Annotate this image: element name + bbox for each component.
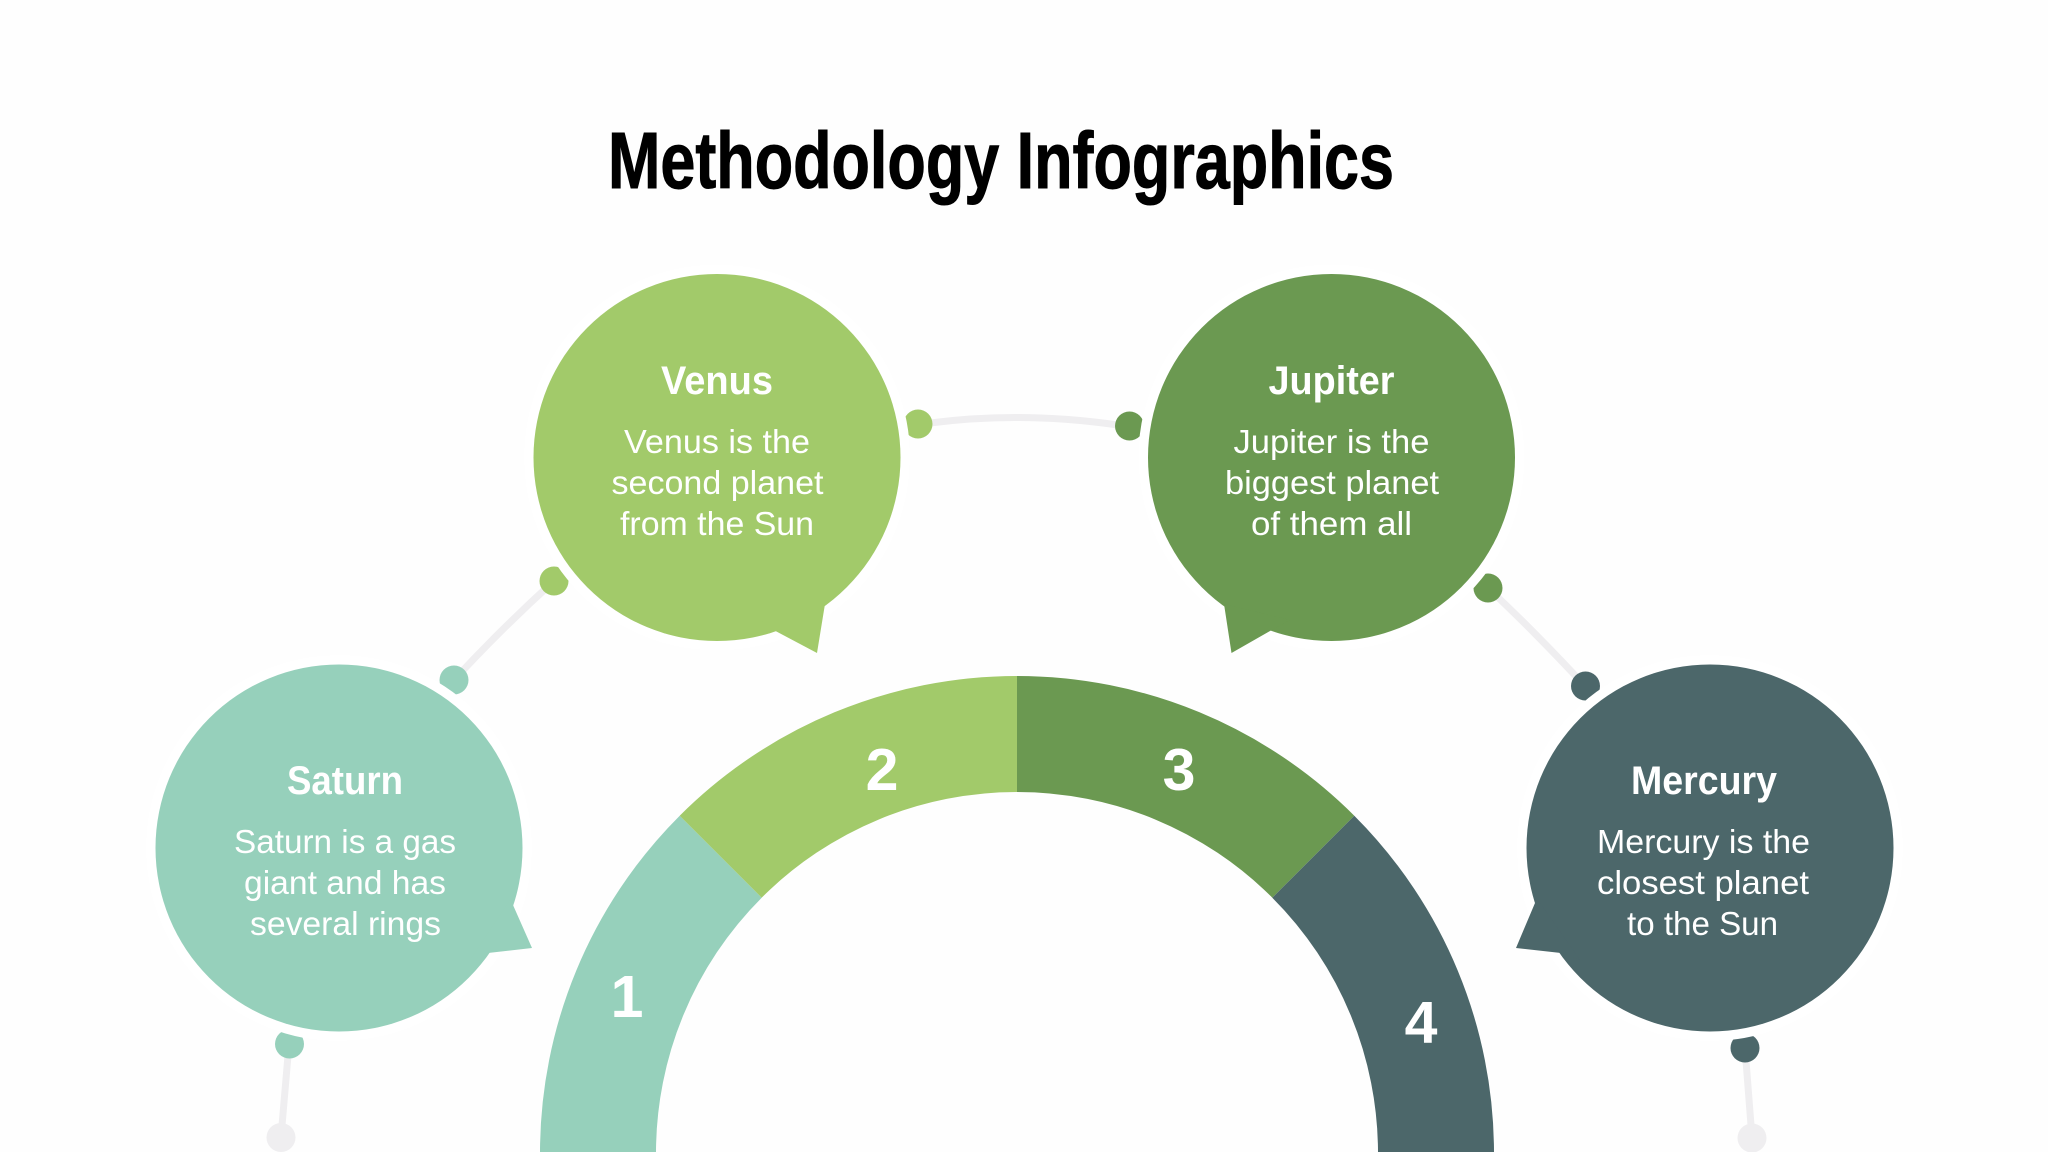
- Saturn description: giant and has: [244, 865, 446, 902]
- Jupiter description: Jupiter is the: [1234, 424, 1430, 461]
- Venus heading: Venus: [661, 359, 773, 403]
- Jupiter description: of them all: [1251, 506, 1412, 543]
- ring segment 4: [1272, 816, 1494, 1152]
- connector dots: Saturn: [275, 666, 468, 1058]
- end dot: Mercury lower connector: [1738, 1124, 1766, 1152]
- Venus description: second planet: [612, 465, 824, 502]
- Mercury heading: Mercury: [1631, 759, 1778, 803]
- semicircular ring chart: [540, 676, 1494, 1152]
- Jupiter description: biggest planet: [1225, 465, 1440, 502]
- Saturn description: [234, 824, 456, 943]
- Mercury description: closest planet: [1597, 865, 1810, 902]
- Saturn description: several rings: [250, 906, 441, 943]
- Venus description: [612, 424, 824, 543]
- Venus bubble shape: [534, 274, 900, 653]
- connector lines between bubbles: [281, 417, 1752, 1138]
- panel: Jupiter speech bubble: [1148, 274, 1515, 653]
- Saturn heading: Saturn: [287, 759, 403, 803]
- panel: Venus speech bubble: [534, 274, 900, 653]
- connector dots: Jupiter: [1115, 412, 1502, 602]
- Mercury description: Mercury is the: [1597, 824, 1810, 861]
- end dot: Saturn lower connector: [266, 1123, 296, 1152]
- panel: Saturn speech bubble: [156, 664, 532, 1032]
- Saturn description: Saturn is a gas: [234, 824, 456, 861]
- Venus description: from the Sun: [620, 506, 814, 543]
- panel: Mercury speech bubble: [1516, 664, 1894, 1032]
- ring segment 3: [1017, 676, 1354, 898]
- Jupiter heading: Jupiter: [1268, 359, 1394, 403]
- Mercury description: to the Sun: [1627, 906, 1778, 943]
- Jupiter description: [1225, 424, 1440, 543]
- connector dots: Mercury: [1571, 672, 1760, 1062]
- number 3: 3: [1163, 737, 1195, 803]
- ring segment 2: [680, 676, 1017, 898]
- Mercury bubble shape: [1516, 664, 1894, 1032]
- Mercury description: [1597, 824, 1810, 943]
- number 4: 4: [1405, 990, 1438, 1056]
- number 1: 1: [611, 964, 643, 1030]
- number 2: 2: [866, 737, 898, 803]
- Jupiter bubble shape: [1148, 274, 1515, 653]
- Venus description: Venus is the: [624, 424, 810, 461]
- connector dots: Venus: [540, 410, 932, 596]
- title: Methodology Infographics: [608, 116, 1394, 205]
- ring segment 1: [540, 816, 762, 1152]
- Saturn bubble shape: [156, 664, 532, 1032]
